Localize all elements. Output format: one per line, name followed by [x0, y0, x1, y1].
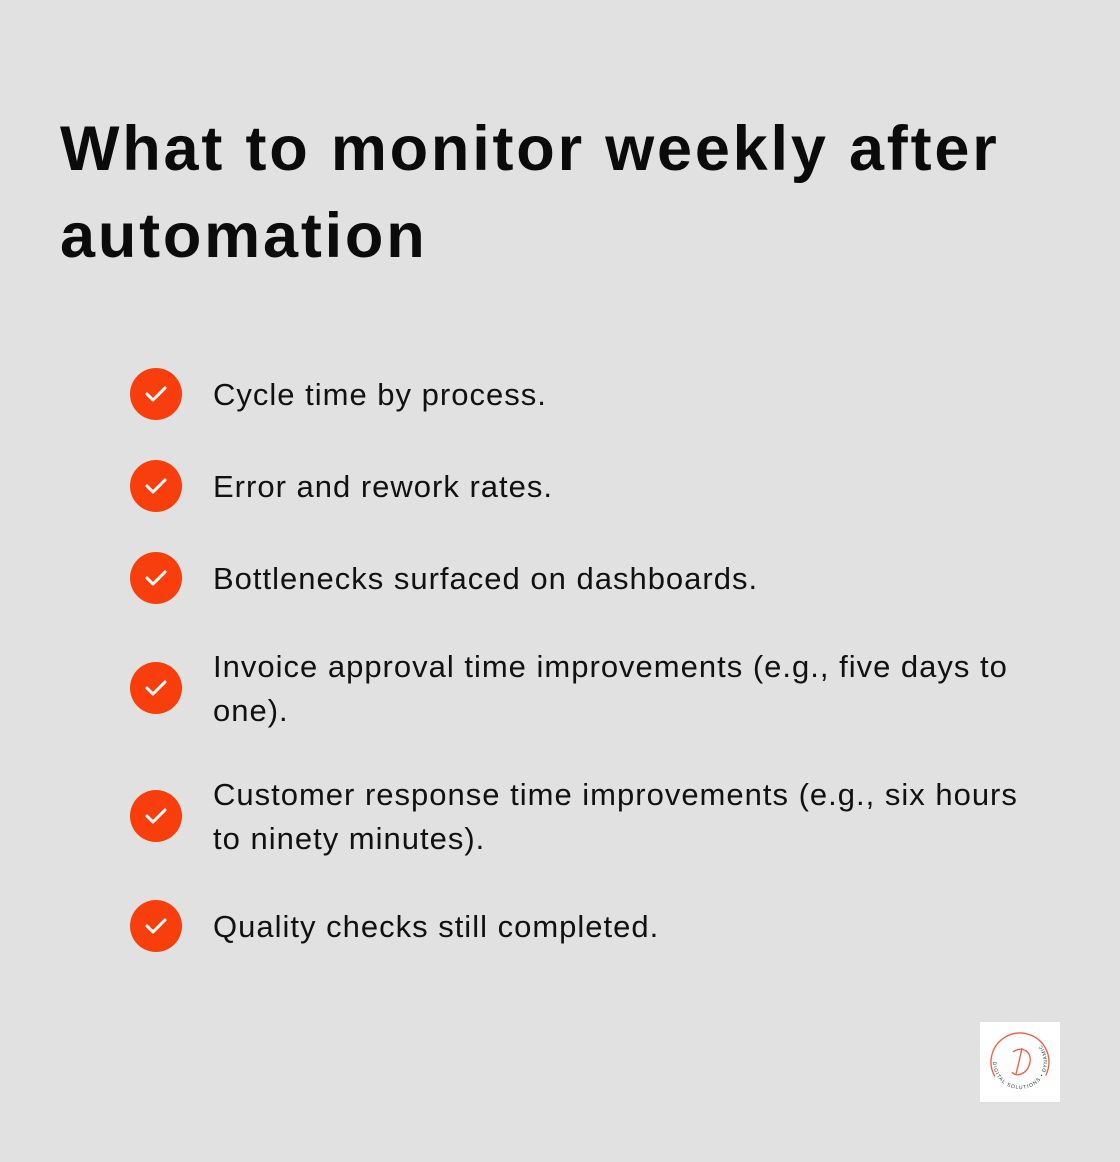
icon: check	[130, 460, 182, 512]
text: Bottlenecks surfaced on dashboards.	[213, 561, 758, 596]
item: quality checks	[130, 900, 659, 952]
text: Invoice approval time improvements (e.g., five days to one).	[213, 649, 1008, 728]
text: Quality checks still completed.	[213, 909, 659, 944]
text: Cycle time by process.	[213, 377, 547, 412]
item: bottlenecks	[130, 552, 758, 604]
icon: check	[130, 900, 182, 952]
text: Customer response time improvements (e.g., six hours to ninety minutes).	[213, 777, 1018, 856]
item: cycle time	[130, 368, 547, 420]
item: error rates	[130, 460, 553, 512]
icon: check	[130, 368, 182, 420]
icon: check	[130, 790, 182, 842]
item: customer response	[130, 777, 1018, 856]
logo: DIGITAL SOLUTIONS • DYNAMIC	[992, 1046, 1047, 1090]
logo	[980, 1022, 1060, 1102]
item: invoice approval	[130, 649, 1008, 728]
text: Error and rework rates.	[213, 469, 553, 504]
icon: check	[130, 662, 182, 714]
title: What to monitor weekly after automation	[60, 114, 1000, 271]
icon: check	[130, 552, 182, 604]
